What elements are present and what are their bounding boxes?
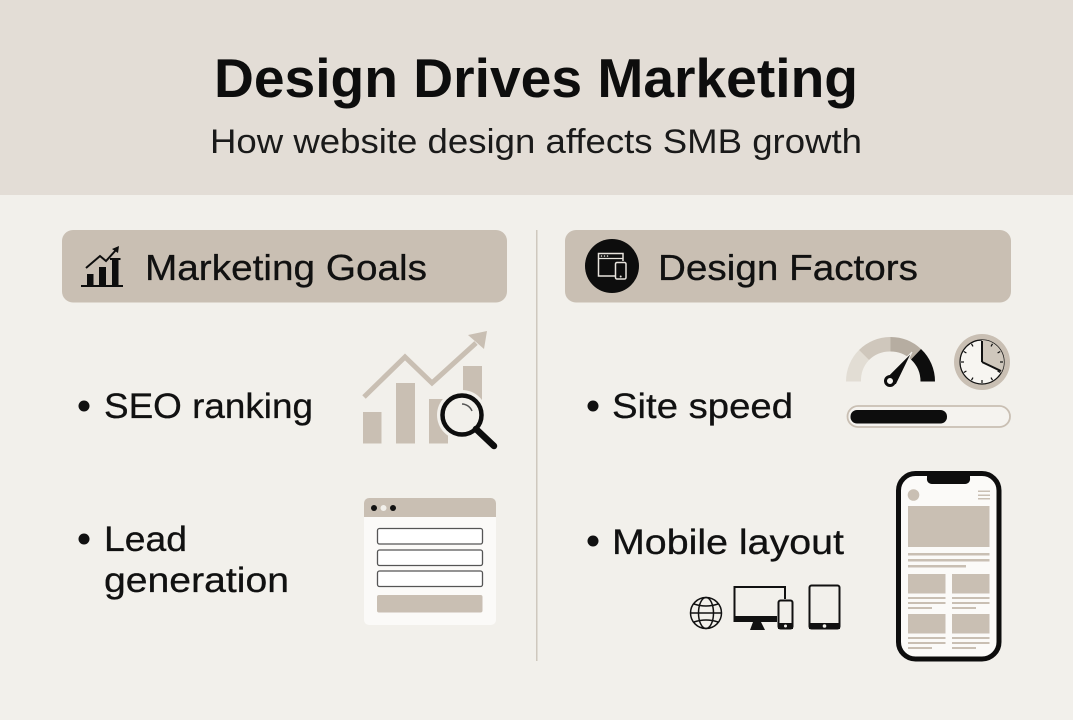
icon: tablet [809,586,840,629]
icon: responsive devices badge [585,239,639,293]
panel: marketing goals [62,230,507,625]
list item: lead generation: Lead [104,520,187,559]
panel: design factors [565,230,1011,659]
list item: mobile layout: Mobile layout [612,523,844,562]
list item: lead generation [78,520,289,600]
list item: site speed: Site speed [612,387,793,426]
icon: growth chart [81,246,123,287]
list item: lead generation: generation [104,561,289,600]
progress bar [848,406,1010,427]
subtitle: How website design affects SMB growth [210,123,862,161]
icon: desktop monitor and phone [734,587,793,630]
icon: phone wireframe [898,473,999,659]
header band [0,0,1073,195]
icon: globe [690,598,722,628]
heading: design factors [565,230,1011,302]
heading: design factors: Design Factors [658,247,918,288]
icon: speedometer gauge [846,337,935,386]
magnifier [437,390,494,446]
heading: marketing goals: Marketing Goals [145,247,427,288]
icon: SEO chart with magnifier [363,331,494,446]
icon: clock [954,334,1010,390]
icon: lead form window [364,498,496,625]
title: Design Drives Marketing [214,47,858,109]
heading: marketing goals [62,230,507,302]
list item: SEO ranking: SEO ranking [104,387,313,426]
